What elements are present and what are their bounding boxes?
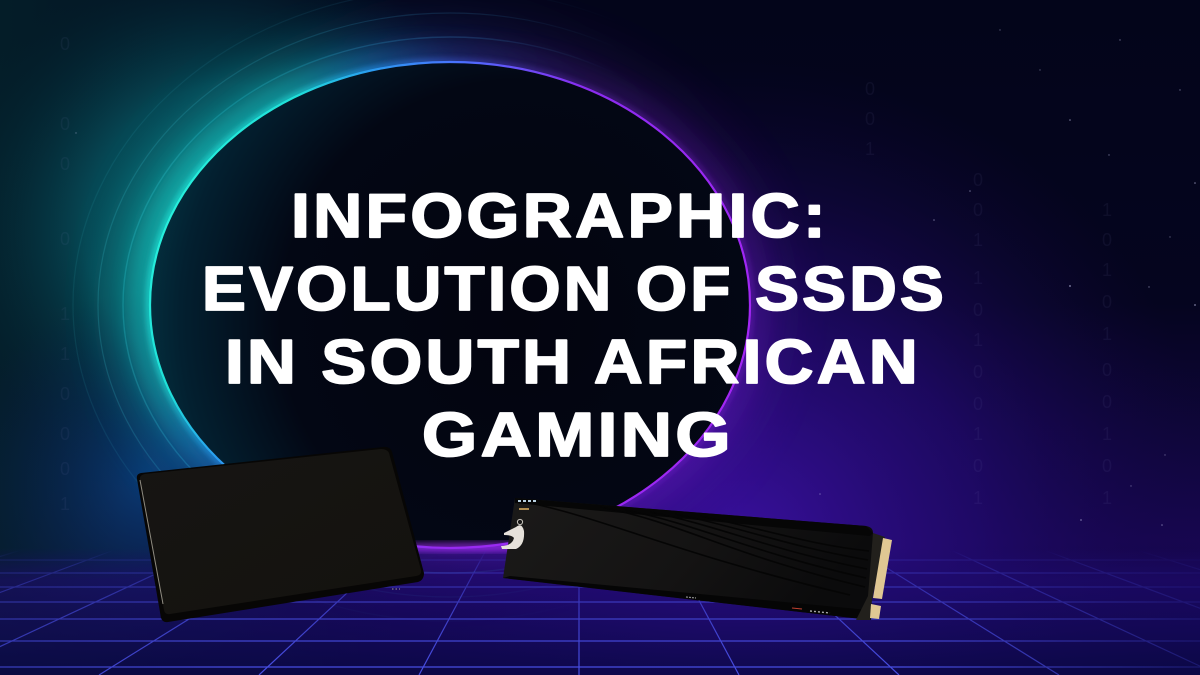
binary code columns: 0 (973, 362, 983, 382)
title line 1: INFOGRAPHIC: (291, 182, 829, 251)
neon ring (138, 50, 762, 560)
starfield (75, 29, 1196, 526)
binary code columns: 1 (973, 230, 983, 250)
binary code columns: 0 (1102, 456, 1112, 476)
perspective floor grid (0, 542, 1200, 675)
binary code columns: 1 (60, 304, 70, 324)
M.2 NVMe SSD (501, 498, 892, 620)
binary code columns: 0 (60, 424, 70, 444)
m.2 gold contacts (873, 538, 892, 599)
outer concentric rings (73, 0, 827, 621)
binary code columns: 1 (973, 330, 983, 350)
binary code columns: 1 (1102, 488, 1112, 508)
binary code columns: 0 (1102, 392, 1112, 412)
title (202, 182, 947, 470)
m.2 PCB end (856, 533, 885, 620)
binary code columns: 1 (1102, 424, 1112, 444)
binary code columns: 0 (865, 79, 875, 99)
binary code columns: 1 (1102, 200, 1112, 220)
binary code columns: 0 (973, 300, 983, 320)
binary code columns: 0 (973, 456, 983, 476)
binary code columns: 1 (973, 268, 983, 288)
binary code columns: 0 (865, 109, 875, 129)
binary code columns: 1 (1102, 260, 1112, 280)
binary code columns (60, 34, 1112, 514)
binary code columns: 1 (865, 139, 875, 159)
binary code columns: 0 (60, 459, 70, 479)
binary code columns: 0 (60, 154, 70, 174)
binary code columns: 1 (60, 494, 70, 514)
binary code columns: 0 (973, 170, 983, 190)
binary code columns: 0 (1102, 360, 1112, 380)
m.2 heatsink body (503, 498, 873, 620)
binary code columns: 0 (973, 394, 983, 414)
2.5-inch SATA SSD (137, 447, 424, 622)
binary code columns: 1 (973, 424, 983, 444)
binary code columns: 1 (1102, 324, 1112, 344)
m.2 mounting notch (501, 525, 524, 549)
m.2 heatsink fins (530, 503, 869, 595)
binary code columns: 0 (60, 229, 70, 249)
binary code columns: 0 (973, 200, 983, 220)
binary code columns: 0 (60, 384, 70, 404)
title line 2: EVOLUTION OF SSDS (202, 255, 947, 324)
binary code columns: 0 (1102, 292, 1112, 312)
binary code columns: 0 (60, 114, 70, 134)
title line 3: IN SOUTH AFRICAN (225, 328, 921, 397)
binary code columns: 1 (60, 344, 70, 364)
title line 4: GAMING (422, 401, 734, 470)
m.2 components (518, 500, 536, 502)
ring interior (150, 62, 750, 548)
binary code columns: 0 (1102, 230, 1112, 250)
binary code columns: 0 (60, 34, 70, 54)
binary code columns: 1 (973, 488, 983, 508)
